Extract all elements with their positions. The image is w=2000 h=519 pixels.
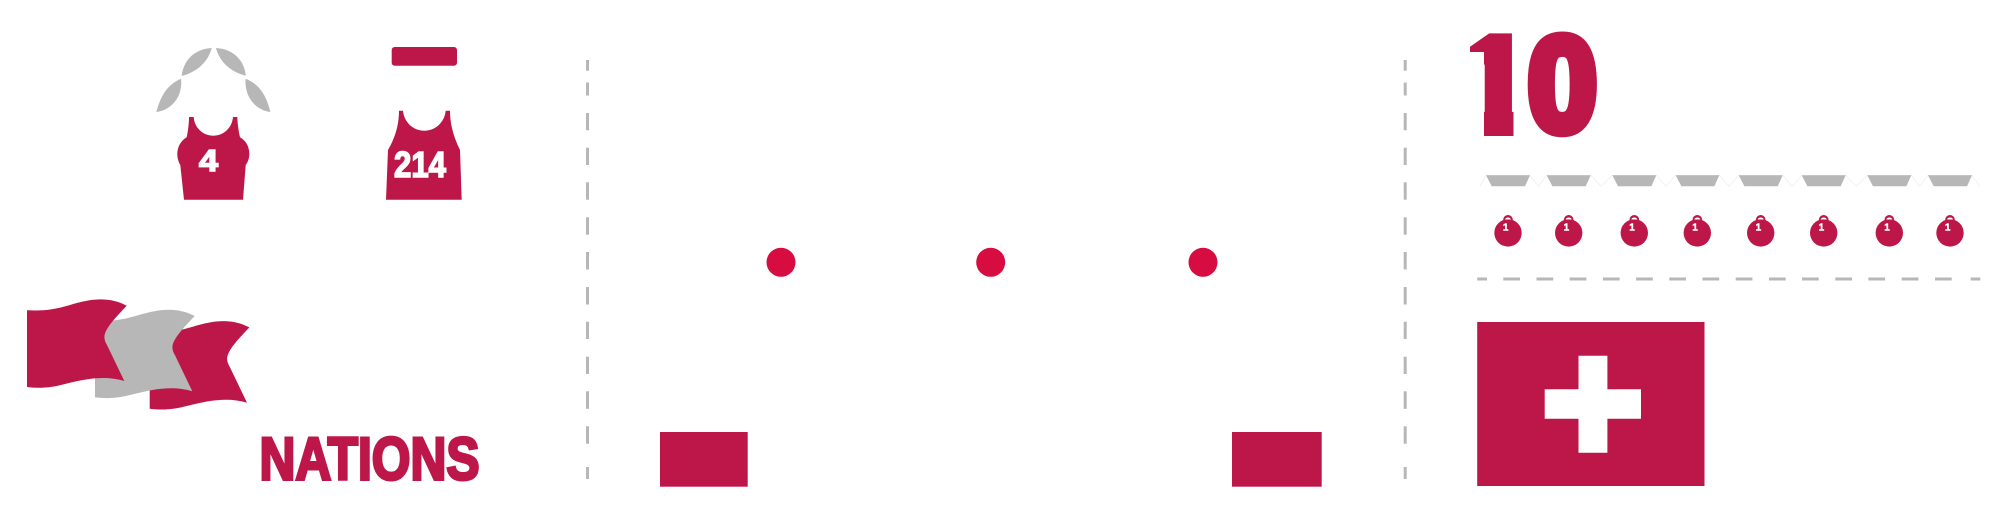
medal 1: [1494, 215, 1522, 247]
icon: swiss flag: [1477, 322, 1704, 486]
medal 7: [1876, 215, 1903, 247]
icon: player 214 with headband: [386, 47, 462, 200]
icon: jersey 4: [177, 117, 249, 200]
jersey number 214: 214: [394, 144, 446, 185]
medal 5: [1747, 215, 1774, 247]
red block left: [660, 432, 748, 487]
red block right: [1232, 432, 1322, 487]
marker dot 3: [1188, 248, 1218, 277]
ribbon connector lines: [1480, 175, 1980, 186]
flag cross: [1545, 356, 1641, 453]
divider: left dashed line: [586, 60, 589, 479]
medal 2: [1555, 215, 1582, 247]
flag field: [1477, 322, 1704, 486]
medal 1: 1: [1503, 223, 1509, 234]
icon: headband: [392, 47, 457, 66]
medal 3: 1: [1629, 223, 1635, 234]
icon: three waving flags: [27, 299, 249, 409]
row of medals: [1494, 215, 1964, 247]
jersey number 4: 4: [199, 143, 219, 178]
divider: horizontal dashed line: [1477, 278, 1980, 280]
medal 4: 1: [1692, 223, 1698, 234]
medal 6: [1810, 215, 1837, 247]
marker dot 1: [766, 248, 796, 277]
medal 5: 1: [1756, 223, 1762, 234]
big number 10: 0: [1528, 10, 1597, 160]
divider: right dashed line: [1404, 60, 1407, 479]
icon: jersey 214: [386, 111, 462, 200]
medal 7: 1: [1884, 223, 1890, 234]
marker dot 2: [976, 248, 1005, 277]
row of ribbons: [1480, 175, 1980, 186]
medal 2: 1: [1564, 223, 1570, 234]
icon: flag right: [150, 321, 249, 409]
heading: nations: NATIONS: [260, 426, 480, 492]
panel: athletes and nations: [27, 47, 480, 492]
medal 6: 1: [1819, 223, 1825, 234]
medal 4: [1684, 215, 1711, 247]
icon: flag left: [27, 299, 127, 388]
icon: braids: [156, 48, 270, 112]
medal 8: [1936, 215, 1964, 247]
icon: flag middle: [95, 310, 195, 398]
medal 3: [1621, 215, 1648, 247]
icon: player 4 with braids: [156, 48, 270, 200]
panel: ten medals and flag: [1461, 10, 1980, 486]
big number 10: [1470, 32, 1597, 138]
medal 8: 1: [1945, 223, 1951, 234]
big number 10: 1: [1461, 11, 1530, 160]
ribbon shapes: [1486, 175, 1972, 186]
panel: centre markers: [660, 248, 1322, 487]
